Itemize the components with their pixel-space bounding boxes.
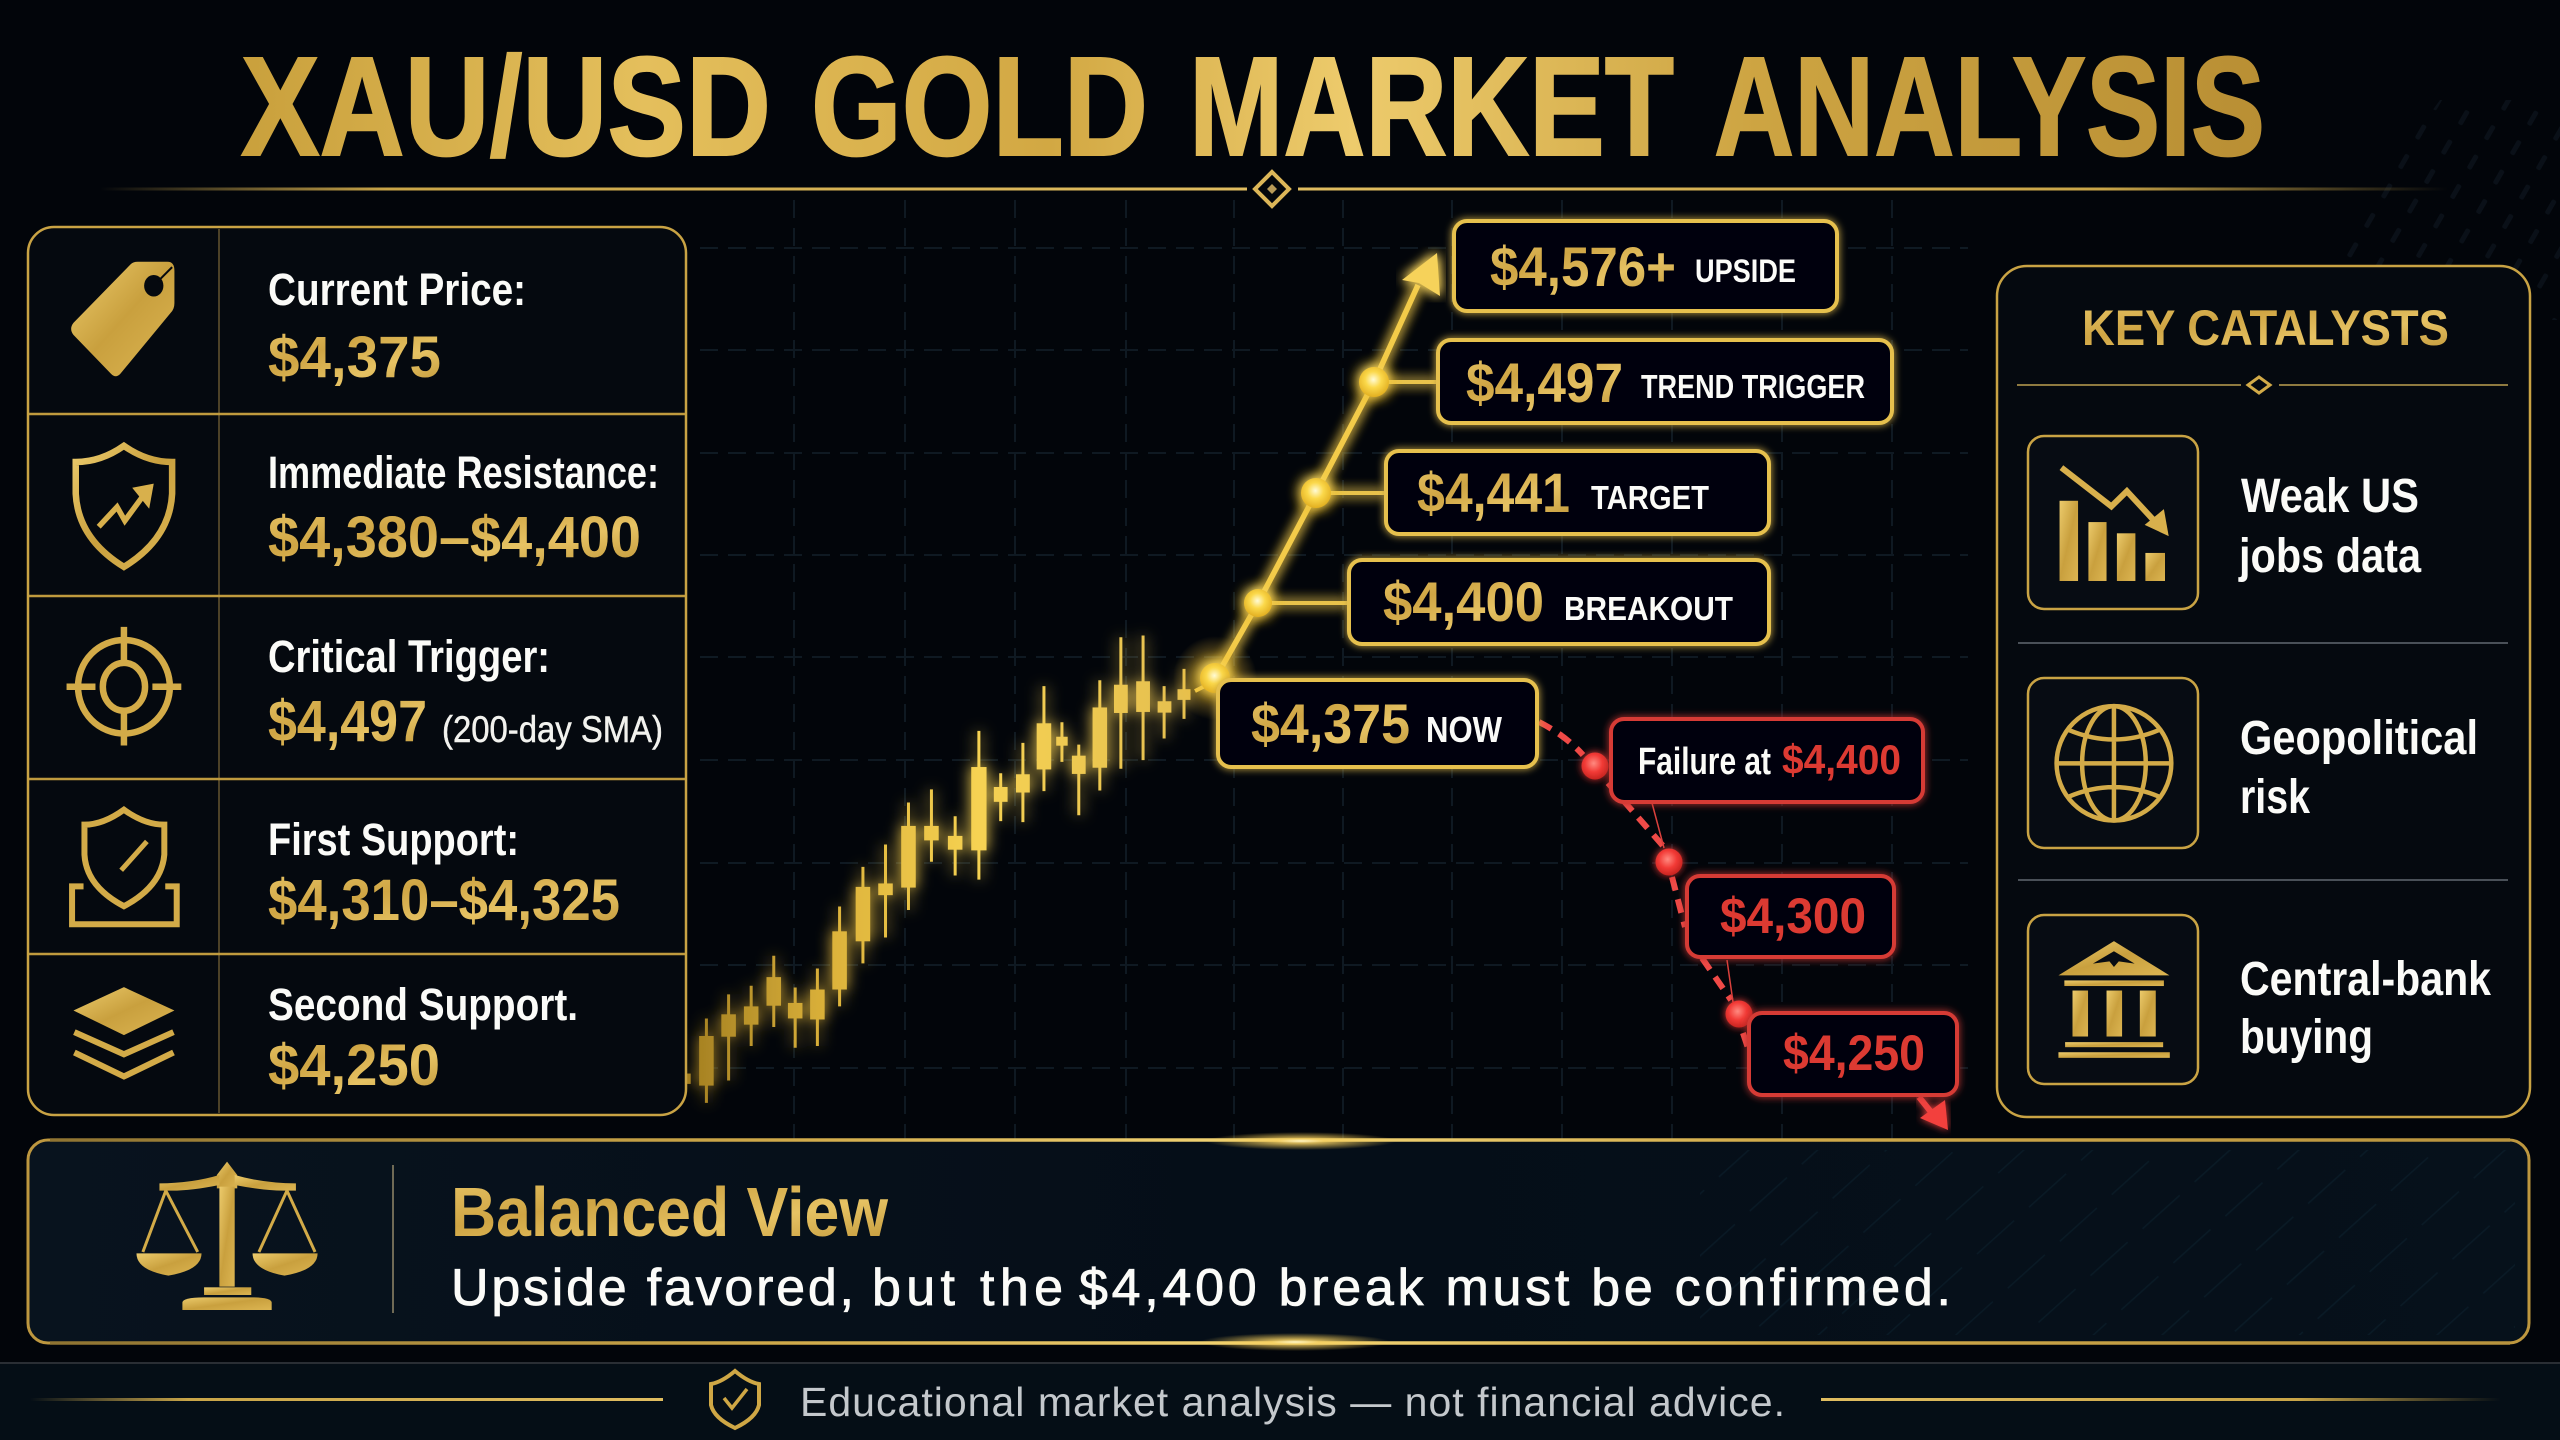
callout: breakout: BREAKOUT [1564,590,1733,627]
row: immediate resistance: $4,380–$4,400 [268,505,641,570]
callout: 4250: $4,250 [1783,1025,1925,1081]
callout: trend trigger: TREND TRIGGER [1641,368,1865,405]
callout: upside: $4,576+ [1490,235,1676,298]
text: balanced view summary: but the [872,1259,1063,1317]
row: critical trigger: Critical Trigger: [268,631,550,682]
callout: now [1218,680,1537,767]
row: second support: Second Support. [268,979,578,1030]
title: ANALYSIS [1714,27,2265,185]
callout: failure at 4400 [1611,719,1923,802]
text: central-bank buying: buying [2240,1011,2373,1064]
callout: failure at 4400: $4,400 [1782,736,1901,783]
text: weak US jobs data [2238,470,2421,583]
text: balanced view summary: $4,400 break must be confirmed. [1079,1259,1951,1317]
panel: key catalysts [1997,266,2530,1117]
arrow: upside [1402,253,1440,296]
icon: layers [73,987,174,1076]
arrow: downside [1919,1097,1948,1130]
title: XAU/USD [241,27,771,185]
red marker dots [1582,752,1752,1028]
callout: trend trigger [1438,340,1892,423]
gold upside path [1173,253,1440,720]
icon: footer shield [711,1371,759,1428]
row: critical trigger: $4,497 [268,689,427,754]
row: second support [268,979,578,1098]
callout: 4250 [1749,1013,1957,1095]
panel: price levels [28,227,686,1115]
text: geopolitical risk: Geopolitical [2240,712,2478,765]
icon: falling bars [2028,436,2198,609]
row: current price: $4,375 [268,325,441,390]
heading: key catalysts: KEY CATALYSTS [2082,300,2449,356]
marker dots [1173,367,1389,720]
row: immediate resistance [268,447,659,570]
row: first support: $4,310–$4,325 [268,868,620,933]
text: balanced view summary [451,1259,1951,1317]
candlestick chart [687,635,1191,1103]
text: central-bank buying: Central-bank [2240,953,2491,1006]
heading divider [2017,377,2508,393]
callout: upside [1454,221,1837,311]
row: current price: Current Price: [268,264,526,315]
callout: trend trigger: $4,497 [1466,351,1623,414]
icon: balance scales [136,1162,318,1310]
callout: upside: UPSIDE [1695,253,1796,289]
chart grid [700,200,1968,1168]
icon: price tag [71,262,174,376]
red downside path [1539,722,1948,1130]
callout: 4300: $4,300 [1720,888,1866,944]
row: second support: $4,250 [268,1033,440,1098]
title [241,27,2265,185]
text: central-bank buying [2240,953,2491,1064]
title divider with diamond [100,172,2448,206]
callout: now: NOW [1426,709,1502,750]
heading: balanced view: Balanced View [451,1173,888,1251]
icon: support shield on tray [72,810,177,924]
row: first support [268,814,620,933]
title: MARKET [1189,27,1674,185]
callout: 4300 [1687,876,1894,957]
faint background texture [2280,100,2560,320]
callout: target [1386,451,1769,534]
icon: globe [2028,678,2198,848]
text: weak US jobs data: jobs data [2238,530,2421,583]
icon: bank [2028,915,2198,1084]
text: geopolitical risk: risk [2240,771,2310,824]
callout: target: TARGET [1591,479,1709,516]
row: critical trigger: (200-day SMA) [442,709,663,750]
footer band [0,1362,2560,1440]
callout: now: $4,375 [1251,692,1410,755]
icon: target [67,627,181,746]
row: critical trigger [268,631,663,754]
text: geopolitical risk [2240,712,2478,824]
panel: balanced view [28,1132,2529,1351]
callout: breakout [1349,560,1769,644]
icon: shield with rising arrow [76,446,172,567]
row: current price [268,264,526,390]
text: weak US jobs data: Weak US [2241,470,2419,523]
footer disclaimer: Educational market analysis — not financial advice. [800,1379,1785,1425]
row: first support: First Support: [268,814,519,865]
title: GOLD [811,27,1148,185]
callout: target: $4,441 [1417,461,1570,524]
text: balanced view summary: Upside favored, [451,1259,854,1317]
callout: breakout: $4,400 [1383,570,1544,633]
row: immediate resistance: Immediate Resistance: [268,447,659,498]
callout: failure at 4400: Failure at [1638,741,1771,783]
